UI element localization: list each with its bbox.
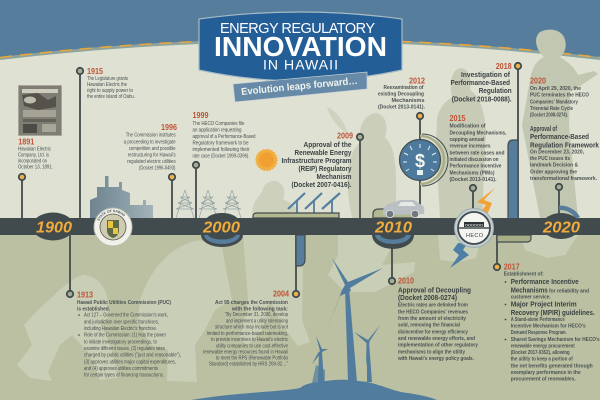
- text block: 1999: an application requesting: [192, 128, 242, 134]
- text block: 1996: (Docket 1996-0493).: [139, 166, 177, 172]
- text block: 1913: examine different issues, (2) regulates rates: [84, 346, 165, 352]
- text block: 2020: Triennial Rate Cycle: [530, 106, 573, 112]
- text block: 1913: 1913: [77, 289, 93, 299]
- text block: 1915: 1915: [87, 66, 103, 76]
- subtitle ribbon: Evolution leaps forward…: [241, 76, 358, 98]
- text block: 2017: customer service.: [511, 295, 551, 301]
- silhouettes: evolution of man, upper part: [252, 30, 598, 218]
- text block: 1913: [77, 289, 181, 378]
- text block: 2017: Mechanisms: [511, 287, 548, 294]
- blue strip at 2018: [508, 140, 518, 218]
- text block: 2012: (Docket 2013-0141).: [378, 104, 425, 110]
- text block: 2017: the utility to keep a portion of: [511, 357, 573, 363]
- text block: 2017: Major Project Interim: [511, 302, 577, 309]
- text block: 2009: Approval of the: [304, 142, 352, 149]
- icon: electric car: [383, 200, 424, 218]
- text block: 1999: rate case (Docket 1999-0396).: [192, 154, 250, 160]
- node: 2000: [201, 213, 243, 247]
- text block: 2012: existing Decoupling: [378, 92, 424, 98]
- text block: 2010 decoupling: Approval of Decoupling: [398, 287, 471, 294]
- background: blue sky band: [0, 0, 600, 58]
- text block: 2020: landmark Decision &: [530, 163, 578, 169]
- text block: 2010 decoupling: from the amount of electricity: [398, 316, 467, 322]
- state seal: STATE OF HAWAII: [97, 210, 126, 221]
- text block: 2017: exemplary performance in the: [511, 370, 581, 376]
- text block: 2015: initiated discussion on: [450, 157, 499, 163]
- text block: 2004: Act 95 charges the Commission: [215, 300, 289, 306]
- icon: blue lightning: [450, 243, 469, 268]
- text block: 2017: for reliability and: [549, 288, 589, 294]
- text block: 2020: PUC terminates the HECO: [530, 93, 590, 99]
- icon: HECO meter: 000000: [465, 222, 484, 227]
- text block: 2020: Companies' Mandatory: [530, 99, 579, 105]
- text block: 2020: Approval of: [530, 126, 557, 133]
- text block: 2004: “By December 31, 2006, develop: [225, 312, 288, 318]
- text block: 1999: implemented following their: [192, 147, 250, 153]
- factory: [90, 176, 153, 218]
- text block: 2020: Performance-Based: [530, 134, 589, 141]
- text block: 1913: including Hawaiian Electric's franchise.: [84, 326, 157, 332]
- text block: 1996: [124, 122, 177, 172]
- title line 1: ENERGY REGULATORY: [220, 21, 375, 37]
- text block: 2012: Reexamination of: [384, 85, 424, 91]
- icon: wind turbines and hill: [191, 258, 437, 400]
- text block: 1996: competition and possible: [129, 146, 176, 152]
- text block: 2004: [203, 289, 289, 367]
- text block: 2010 decoupling: implementation of other regulatory: [398, 343, 479, 349]
- text block: 2004: 2004: [273, 289, 289, 299]
- background: cream upper field: [0, 0, 600, 225]
- text block: 1891: Hawaiian Electric: [18, 146, 51, 152]
- text block: 2015: Performance Incentive: [450, 164, 502, 170]
- text block: 2009: 2009: [337, 130, 353, 140]
- text block: 2015: 2015: [450, 113, 466, 123]
- text block: 1913: Hawaii Public Utilities Commission (PUC): [77, 300, 171, 306]
- text block: 2017: the net benefits generated through: [511, 363, 593, 369]
- text block: 2015: capping annual: [450, 137, 485, 143]
- text block: 2004: and implement a utility ratemaking: [226, 318, 288, 324]
- text block: 2020: (Docket 2008-0274).: [530, 113, 568, 119]
- text block: 2015: Decoupling Mechanisms,: [450, 130, 507, 136]
- text block: 1913: to initiate investigatory proceedings, to: [84, 339, 157, 345]
- text block: 1999: 1999: [192, 110, 209, 120]
- title line 2: INNOVATION: [214, 31, 387, 62]
- text block: 2010 decoupling: (Docket 2008-0274): [398, 295, 457, 302]
- text block: 2018: Regulation: [479, 88, 512, 95]
- node: 2010: [372, 220, 414, 249]
- text block: 2004: renewable energy resources found in Hawaii: [203, 350, 288, 356]
- text block: 1913: Act 127 – Governed the Commission's work,: [84, 313, 168, 319]
- text block: 2010 decoupling: sold, removing the financial: [398, 323, 460, 329]
- text block: 1915: right to supply power to: [87, 88, 133, 94]
- background: sage lower field: [0, 226, 600, 400]
- icon: dollar light bulb: [400, 134, 448, 186]
- text block: 1891: incorporated on: [18, 158, 47, 164]
- title banner: [199, 12, 402, 81]
- text block: 2018: Investigation of: [461, 72, 511, 79]
- text block: 2004: structure which may include but is not: [215, 325, 288, 331]
- node: 2020: 2020: [542, 220, 580, 236]
- icon: HECO meter: [454, 208, 494, 248]
- text block: 2009: Renewable Energy: [294, 150, 352, 157]
- text block: 1913: and jurisdiction over specific franchises,: [84, 319, 159, 325]
- icon: HECO meter: HECO: [466, 233, 484, 239]
- text block: 2010 decoupling: 2010: [398, 275, 414, 285]
- text block: 2004: to meet the RPS (Renewable Portfolio: [216, 356, 288, 362]
- text block: 2018: (Docket 2018-0088).: [452, 96, 512, 104]
- text block: 2020: [530, 75, 599, 182]
- icon: solar panels: [288, 193, 340, 213]
- text block: 2010 decoupling: with Hawaii's energy policy goals.: [397, 356, 474, 362]
- text block: 2018: [450, 61, 512, 104]
- text block: 2020: Order approving the: [530, 169, 577, 175]
- text block: 1999: The HECO Companies file: [192, 121, 244, 127]
- silhouettes: evolution of man, lower part: [17, 235, 578, 382]
- text block: 1913: Role of the Commission: (1) Has the power: [84, 333, 166, 339]
- marker stems: [22, 66, 559, 294]
- text block: 2018: Performance-Based: [450, 80, 510, 87]
- icon: dollar light bulb: $: [415, 151, 425, 171]
- text block: 2017: renewable energy procurement: [511, 344, 575, 350]
- node: 1900: 1900: [36, 220, 72, 236]
- text block: 2010 decoupling: mechanisms to align the utility: [398, 349, 466, 355]
- text block: 2010 decoupling: Electric rates are delinked from: [398, 303, 468, 309]
- text block: 2012: [378, 76, 425, 110]
- text block: 1891: Company, Ltd. is: [18, 152, 49, 158]
- bump behind car: [373, 209, 413, 218]
- text block: 2017: A Stand-alone Performance: [511, 317, 565, 323]
- text block: 2015: (Docket 2013-0141).: [450, 177, 497, 183]
- node: 2010: 2010: [374, 220, 412, 236]
- text block: 1915: the entire island of Oahu.: [87, 94, 135, 100]
- text block: 1891: 1891: [18, 136, 35, 146]
- text block: 1996: 1996: [161, 122, 177, 132]
- platform above bar: [253, 213, 339, 218]
- transmission towers: [176, 190, 241, 218]
- text block: 1913: is established.: [77, 307, 110, 313]
- text block: 1915: The Legislature grants: [87, 76, 128, 82]
- text block: 1999: [192, 110, 256, 160]
- node: 2020: [542, 208, 580, 239]
- shelf at 2017: [497, 235, 531, 242]
- text block: 2020: 2020: [530, 75, 546, 85]
- text block: 1913: for certain types of financing transactions.: [84, 372, 164, 378]
- icon: orange lightning: [477, 188, 495, 215]
- text block: 2009: (REIP) Regulatory: [298, 166, 352, 173]
- text block: 2015: revenue increases: [450, 144, 490, 150]
- timeline bar: [0, 218, 600, 235]
- text block: 2004: limited to performance-based ratemaking,: [207, 331, 288, 337]
- text block: 1915: Hawaiian Electric the: [87, 82, 127, 88]
- text block: 2004: Standard) established by HRS 269-92…”: [209, 361, 288, 367]
- text block: 2012: 2012: [409, 76, 425, 86]
- text block: 2004: utility companies to use cost-effective: [216, 343, 288, 349]
- text block: 1996: regulated electric utilities: [127, 159, 176, 165]
- text block: 2017: Establishment of:: [504, 272, 544, 278]
- node: 1900: [32, 212, 74, 240]
- photo: 1891 newspaper: [18, 86, 62, 136]
- text block: 1891: October 13, 1891.: [18, 164, 53, 170]
- text block: 2017: Performance Incentive: [511, 279, 579, 286]
- text block: 2010 decoupling: the HECO Companies' revenues: [398, 309, 468, 315]
- text block: 2010 decoupling: and renewable energy efforts, and: [398, 336, 475, 342]
- text block: 1913: and (4) approves utilities commitments: [84, 366, 158, 372]
- text block: 2015: between rate cases and: [450, 150, 504, 156]
- text block: 1996: The Commission institutes: [126, 133, 176, 139]
- text block: 1891: [18, 136, 53, 170]
- text block: 2010 decoupling: [397, 275, 479, 362]
- node: 2000: 2000: [202, 220, 240, 236]
- marker dots: [19, 63, 562, 297]
- text block: 2015: Modification of: [450, 124, 486, 130]
- text block: 2017: Demand Response Program.: [511, 330, 567, 336]
- wavy dashed stripe: [0, 40, 600, 58]
- text block: 2009: (Docket 2007-0416).: [292, 182, 352, 189]
- text block: 2017: procurement of renewables.: [511, 376, 576, 382]
- text block: 1999: approval of a Performance-Based: [192, 134, 256, 140]
- text block: 2017: Incentive Mechanism for HECO's: [511, 324, 586, 330]
- text block: 2009: Infrastructure Program: [282, 158, 352, 165]
- title line 3: IN HAWAII: [263, 56, 338, 72]
- text block: 1915: [87, 66, 135, 100]
- text block: 2017: 2017: [504, 261, 520, 271]
- text block: 2018: 2018: [496, 61, 512, 71]
- text block: 1913: charged by public utilities ("just and reasonable"),: [84, 353, 181, 359]
- text block: 2015: [450, 113, 507, 183]
- text block: 2020: On December 23, 2020,: [530, 149, 584, 155]
- text block: 1996: a proceeding to investigate: [124, 139, 176, 145]
- text block: 1996: restructuring for Hawaii's: [128, 152, 176, 158]
- text block: 2004: to provide incentives to Hawaii's electric: [211, 337, 288, 343]
- text block: 2020: the PUC issues its: [530, 156, 570, 162]
- text block: 2015: Mechanisms (PIMs): [450, 170, 495, 176]
- text block: 2020: On April 29, 2020, the: [530, 86, 581, 92]
- text block: 2010 decoupling: disincentive for energy efficiency: [398, 329, 469, 335]
- text block: 2009: [282, 130, 353, 189]
- text block: 1999: Regulatory framework to be: [192, 140, 248, 146]
- text block: 2009: Mechanism: [316, 174, 352, 181]
- text block: 1913: (3) approves utilities major capital expenditures,: [84, 359, 176, 365]
- text block: 2017: [504, 261, 600, 382]
- state seal: [94, 208, 132, 246]
- blue strip at 2004: [296, 235, 305, 266]
- icon: sun: [256, 150, 277, 170]
- text block: 2012: Mechanisms: [392, 98, 424, 104]
- text block: 2004: with the following task:: [231, 306, 288, 312]
- text block: 2017: (Docket 2017-0352), allowing: [511, 350, 570, 356]
